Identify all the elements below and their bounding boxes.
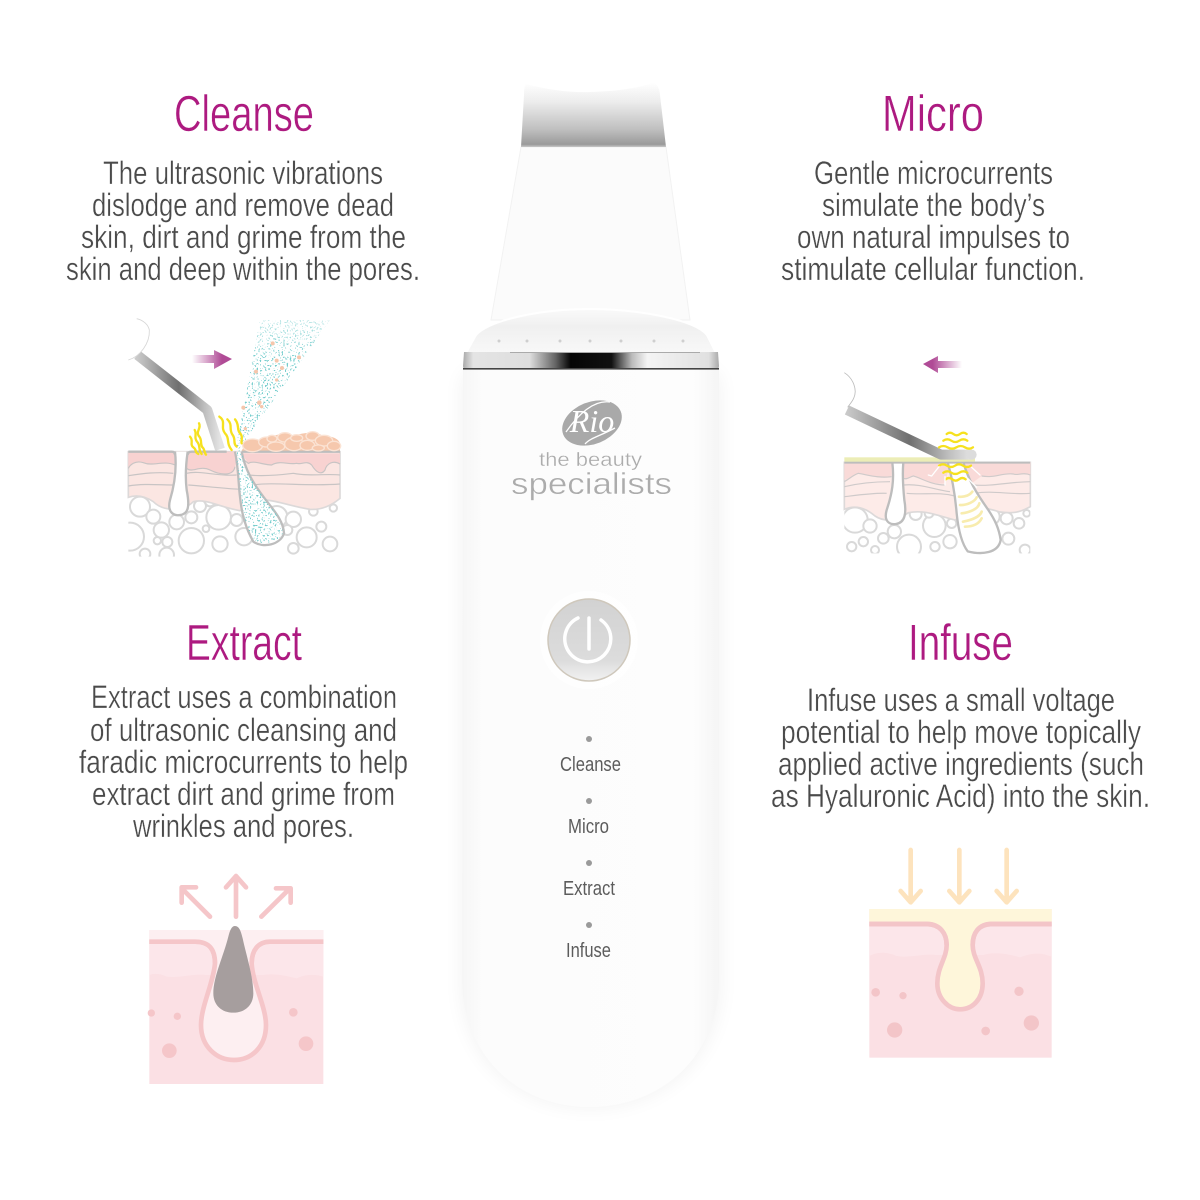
- device: [462, 83, 720, 1107]
- text block: cleanse description: skin, dirt and grime from the: [81, 219, 406, 255]
- text block: cleanse description: skin and deep within the pores.: [66, 251, 420, 287]
- text block: extract description: faradic microcurrents to help: [79, 744, 408, 780]
- probe: [137, 355, 220, 449]
- text block: cleanse description: dislodge and remove dead: [92, 187, 394, 223]
- heading: Cleanse: Cleanse: [174, 85, 314, 142]
- pores dots: [148, 1008, 313, 1058]
- panel: extract: [79, 614, 408, 1084]
- vibration waves: [939, 433, 973, 481]
- blackhead plug: [213, 926, 253, 1013]
- illustration: extraction from pore: [148, 876, 323, 1084]
- heading: Extract: Extract: [186, 614, 302, 671]
- pore with serum: [869, 924, 1052, 1009]
- arrows: downward: [901, 850, 1017, 902]
- arrow: left: [923, 356, 962, 373]
- arrow: right: [192, 350, 232, 369]
- text block: infuse description: Infuse uses a small voltage: [807, 682, 1115, 718]
- power button: [540, 591, 638, 689]
- probe: [847, 410, 972, 455]
- metal blade tip: [521, 83, 666, 147]
- logo: Rio the beauty specialists: [511, 392, 672, 501]
- spray of particles: [235, 320, 330, 470]
- serum film layer: [844, 457, 975, 462]
- panel: infuse: [771, 614, 1150, 1058]
- text block: micro description: [781, 155, 1085, 287]
- text block: micro description: Gentle microcurrents: [814, 155, 1053, 191]
- micro current sparks: [928, 467, 980, 487]
- text block: infuse description: [771, 682, 1150, 814]
- hair follicle pores: [886, 462, 1001, 553]
- arrows: outward: [182, 876, 291, 917]
- logo: Rio the beauty specialists: the beauty: [539, 450, 643, 471]
- mode labels: Cleanse: [560, 754, 621, 776]
- pore: [149, 942, 323, 1060]
- dots: [871, 987, 1039, 1038]
- device shadow: [462, 370, 720, 1107]
- heading: Infuse: Infuse: [908, 614, 1013, 671]
- text block: extract description: of ultrasonic cleansing and: [90, 712, 397, 748]
- illustration: ultrasonic cleansing of skin: [116, 319, 341, 562]
- text block: extract description: wrinkles and pores.: [132, 808, 354, 844]
- dead skin cells: [242, 432, 341, 452]
- mode labels: Extract: [563, 878, 615, 900]
- logo: Rio the beauty specialists: specialists: [511, 466, 672, 501]
- illustration: microcurrent on skin: [842, 373, 1030, 559]
- heading: Micro: Micro: [882, 85, 984, 142]
- hair follicle pores: [169, 452, 284, 545]
- scraper blade: [491, 147, 690, 320]
- text block: extract description: [79, 679, 408, 844]
- head cap: [466, 309, 716, 353]
- mode labels: [560, 736, 621, 962]
- pale energy arcs: [959, 492, 982, 527]
- text block: extract description: Extract uses a combination: [91, 679, 397, 715]
- text block: micro description: stimulate cellular function.: [781, 251, 1085, 287]
- illustration: infusion into pore: [869, 850, 1052, 1058]
- text block: cleanse description: The ultrasonic vibrations: [103, 155, 383, 191]
- text block: extract description: extract dirt and grime from: [92, 776, 395, 812]
- panel: cleanse: [66, 85, 420, 562]
- text block: micro description: own natural impulses to: [797, 219, 1070, 255]
- chrome band: [463, 352, 719, 370]
- vibration waves: [190, 417, 242, 455]
- text block: micro description: simulate the body’s: [822, 187, 1045, 223]
- logo: Rio the beauty specialists: Rio: [569, 403, 614, 439]
- panel: micro: [781, 85, 1085, 559]
- mode labels: Infuse: [566, 940, 611, 962]
- mode labels: Micro: [568, 816, 609, 838]
- device body: [462, 369, 719, 1107]
- text block: cleanse description: [66, 155, 420, 287]
